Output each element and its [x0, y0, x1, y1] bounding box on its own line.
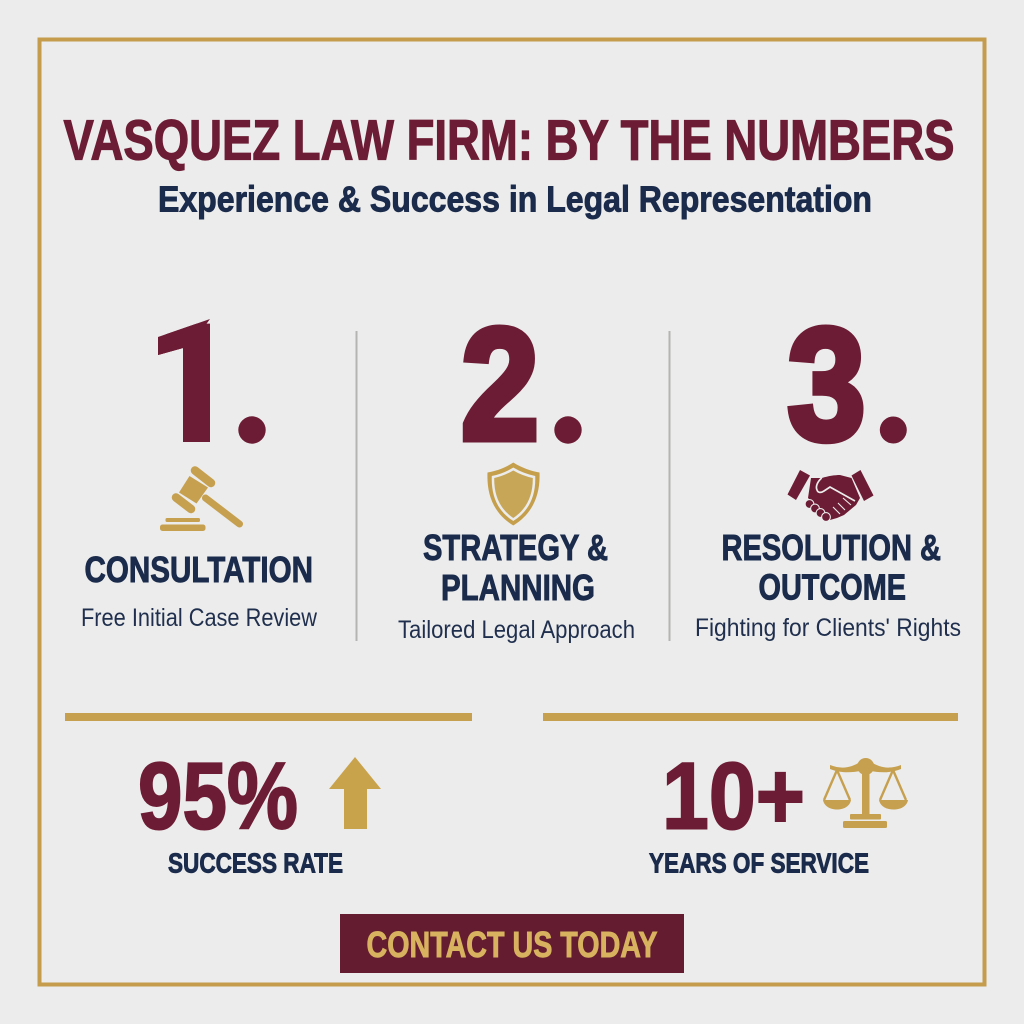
icon: shield: [487, 462, 540, 526]
heading: consultation: CONSULTATION: [84, 549, 313, 590]
number 3: 3: [788, 295, 866, 473]
heading: strategy and planning: [423, 527, 608, 608]
call-to-action button: [340, 914, 684, 973]
panel: step 1 consultation: [81, 296, 318, 632]
icon: scales of justice: [823, 758, 908, 828]
gold rule right: [543, 713, 958, 721]
stat: success rate: [138, 744, 381, 878]
text: free initial case review: Free Initial Case Review: [81, 604, 318, 632]
heading: resolution and outcome: RESOLUTION &: [722, 527, 941, 568]
divider left: [356, 331, 358, 641]
icon: handshake: [788, 470, 874, 521]
label: years of service: YEARS OF SERVICE: [649, 848, 869, 878]
call-to-action button: CONTACT US TODAY: [366, 924, 658, 965]
panel: step 2 strategy: [398, 295, 635, 644]
heading: strategy and planning: STRATEGY &: [423, 527, 608, 568]
number 1: 1: [146, 296, 234, 474]
number 1: [158, 319, 266, 444]
number 2: 2: [461, 295, 539, 473]
divider right: [668, 331, 670, 641]
heading: resolution and outcome: OUTCOME: [758, 566, 906, 608]
text: tailored legal approach: Tailored Legal Approach: [398, 616, 635, 644]
number 3: .: [882, 364, 905, 453]
number 95%: 95%: [138, 744, 298, 850]
stat: years of service: [649, 744, 908, 878]
number 1: .: [241, 364, 263, 453]
label: success rate: SUCCESS RATE: [168, 848, 343, 878]
icon: gavel: [160, 470, 240, 531]
number 10+: 10+: [662, 744, 805, 850]
heading: strategy and planning: PLANNING: [441, 567, 595, 608]
number 2: .: [557, 364, 579, 453]
text: fighting for clients' rights: Fighting for Clients' Rights: [695, 614, 961, 642]
panel: step 3 resolution: [695, 295, 961, 642]
gold rule left: [65, 713, 472, 721]
subtitle: Experience & Success in Legal Representation: [158, 178, 872, 220]
heading: resolution and outcome: [722, 527, 941, 608]
icon: up arrow: [329, 757, 381, 829]
